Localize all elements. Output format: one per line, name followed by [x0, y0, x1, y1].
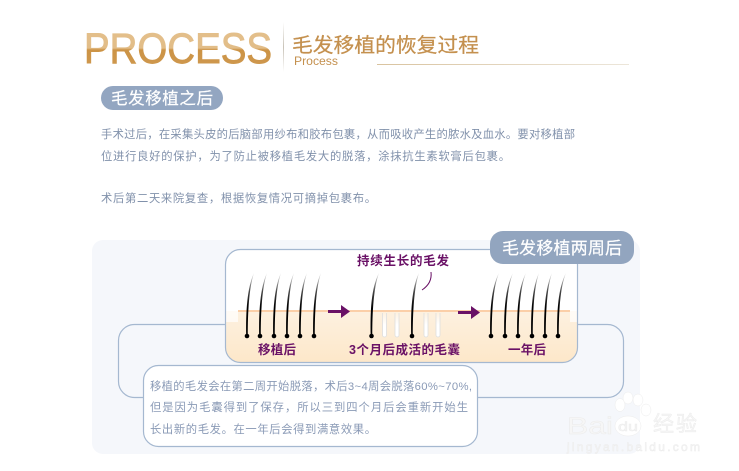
callout: hair shedding explanation: 移植的毛发会在第二周开始脱落，术后3~4周会脱落60%~70%, — [150, 379, 472, 393]
watermark: Baidu jingyan: jingyan.baidu.com — [566, 440, 700, 454]
tag: two weeks after — [490, 231, 634, 264]
vertical divider — [283, 22, 284, 72]
watermark: Baidu jingyan: Bai — [567, 413, 613, 440]
heading: recovery process: Process — [294, 54, 338, 68]
section pill: after transplant: 毛发移植之后 — [111, 89, 213, 108]
connector box — [118, 324, 624, 398]
text block: post-op care — [101, 127, 575, 205]
watermark: Baidu jingyan: 经验 — [653, 413, 697, 436]
section pill: after transplant — [101, 86, 223, 110]
hairs: one year — [489, 273, 566, 338]
callout: hair shedding explanation — [144, 366, 478, 446]
tag: two weeks after: 毛发移植两周后 — [502, 239, 622, 258]
text block: post-op care: 位进行良好的保护，为了防止被移植毛发大的脱落，涂抹抗生素软膏后包裹。 — [101, 149, 510, 163]
title: PROCESS wordmark: PROCESS — [84, 25, 272, 73]
watermark: Baidu jingyan — [566, 392, 700, 454]
hairs: after transplant — [245, 273, 321, 338]
panel background — [92, 240, 640, 454]
pointer line — [422, 272, 431, 290]
hairs and follicles: three months — [369, 273, 440, 338]
heading underline — [377, 64, 629, 65]
heading: recovery process: 毛发移植的恢复过程 — [292, 34, 479, 57]
diagram labels — [258, 253, 546, 357]
arrow 2 — [458, 306, 480, 319]
callout: hair shedding explanation: 但是因为毛囊得到了保存，所以三到四个月后会重新开始生 — [150, 400, 468, 414]
panel: two weeks after transplant — [92, 231, 640, 454]
diagram labels: 持续生长的毛发 — [357, 253, 449, 268]
growth diagram — [225, 250, 578, 363]
callout: hair shedding explanation: 长出新的毛发。在一年后会得到满意效果。 — [150, 422, 376, 436]
watermark: Baidu jingyan: du — [618, 419, 638, 434]
heading: recovery process — [292, 34, 479, 68]
diagram labels: 移植后 — [258, 342, 296, 357]
arrow 1 — [328, 305, 350, 318]
text block: post-op care: 术后第二天来院复查，根据恢复情况可摘掉包裹布。 — [101, 191, 376, 205]
diagram labels: 3个月后成活的毛囊 — [349, 342, 460, 357]
diagram labels: 一年后 — [508, 342, 546, 357]
text block: post-op care: 手术过后，在采集头皮的后脑部用纱布和胶布包裹，从而吸收产生的脓水及血水。要对移植部 — [101, 127, 575, 141]
